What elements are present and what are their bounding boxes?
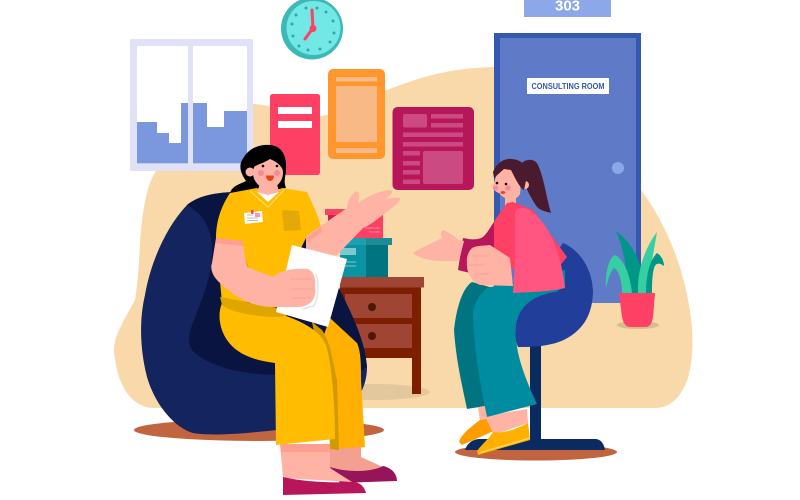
shirt pocket xyxy=(282,210,301,231)
room number sign xyxy=(524,0,611,17)
patient back foot xyxy=(478,404,488,422)
patient neck xyxy=(505,196,516,210)
patient front foot xyxy=(485,409,528,433)
patient mouth xyxy=(500,191,506,194)
floor shadow of nightstand xyxy=(320,384,430,400)
wall clock xyxy=(281,0,343,60)
patient cheeks xyxy=(493,186,498,190)
paper xyxy=(276,245,347,327)
patient front shoe xyxy=(477,423,530,455)
sleeve cuff xyxy=(306,227,322,242)
red box on nightstand xyxy=(325,209,383,240)
background blob xyxy=(114,67,693,408)
nurse neck xyxy=(257,184,279,195)
left rug xyxy=(134,419,384,441)
patient sleeve xyxy=(513,208,565,293)
nurse ear xyxy=(246,168,254,176)
patient ear xyxy=(521,181,529,189)
magenta poster xyxy=(392,107,474,190)
nurse eyes xyxy=(262,165,264,167)
right rug xyxy=(455,444,617,460)
nurse trousers xyxy=(220,303,335,445)
patient ponytail and hair back xyxy=(520,160,551,213)
nurse back shoe xyxy=(330,466,397,483)
nurse back leg xyxy=(322,318,365,450)
nurse mouth xyxy=(266,176,274,181)
patient reaching hand xyxy=(413,230,464,261)
nurse front shoe xyxy=(283,477,366,495)
collar xyxy=(257,192,279,202)
name badge xyxy=(244,210,263,224)
door knob xyxy=(612,162,624,174)
nurse xyxy=(211,145,400,495)
nurse face xyxy=(253,158,283,188)
nurse hair back xyxy=(230,145,286,193)
nurse shirt xyxy=(216,188,321,303)
patient torso xyxy=(491,202,567,290)
window xyxy=(130,39,253,171)
patient hair front xyxy=(493,159,527,190)
patient xyxy=(413,159,592,455)
nurse cheeks xyxy=(258,170,264,176)
nurse raised arm and hand xyxy=(306,190,400,262)
red poster xyxy=(270,94,320,175)
magenta cuff xyxy=(458,222,494,273)
patient front trouser leg xyxy=(473,270,565,417)
teal box on nightstand xyxy=(338,238,392,277)
consulting room sign: CONSULTING ROOM xyxy=(532,81,604,91)
orange poster xyxy=(328,69,385,159)
patient fist xyxy=(467,245,513,286)
stool seat front xyxy=(515,288,592,347)
potted plant xyxy=(606,231,664,329)
patient back trouser leg xyxy=(454,282,500,409)
bean bag chair xyxy=(141,192,367,434)
trouser shade strip xyxy=(312,322,339,450)
patient back shoe xyxy=(459,418,496,445)
patient face xyxy=(493,168,520,199)
door xyxy=(494,33,641,303)
stool xyxy=(465,243,605,450)
nurse front foot xyxy=(280,444,352,482)
consulting room sign xyxy=(527,78,609,94)
nurse near arm and fist xyxy=(211,238,315,307)
patient eyes xyxy=(496,182,498,184)
nurse back foot xyxy=(330,447,385,482)
nightstand xyxy=(340,277,424,394)
